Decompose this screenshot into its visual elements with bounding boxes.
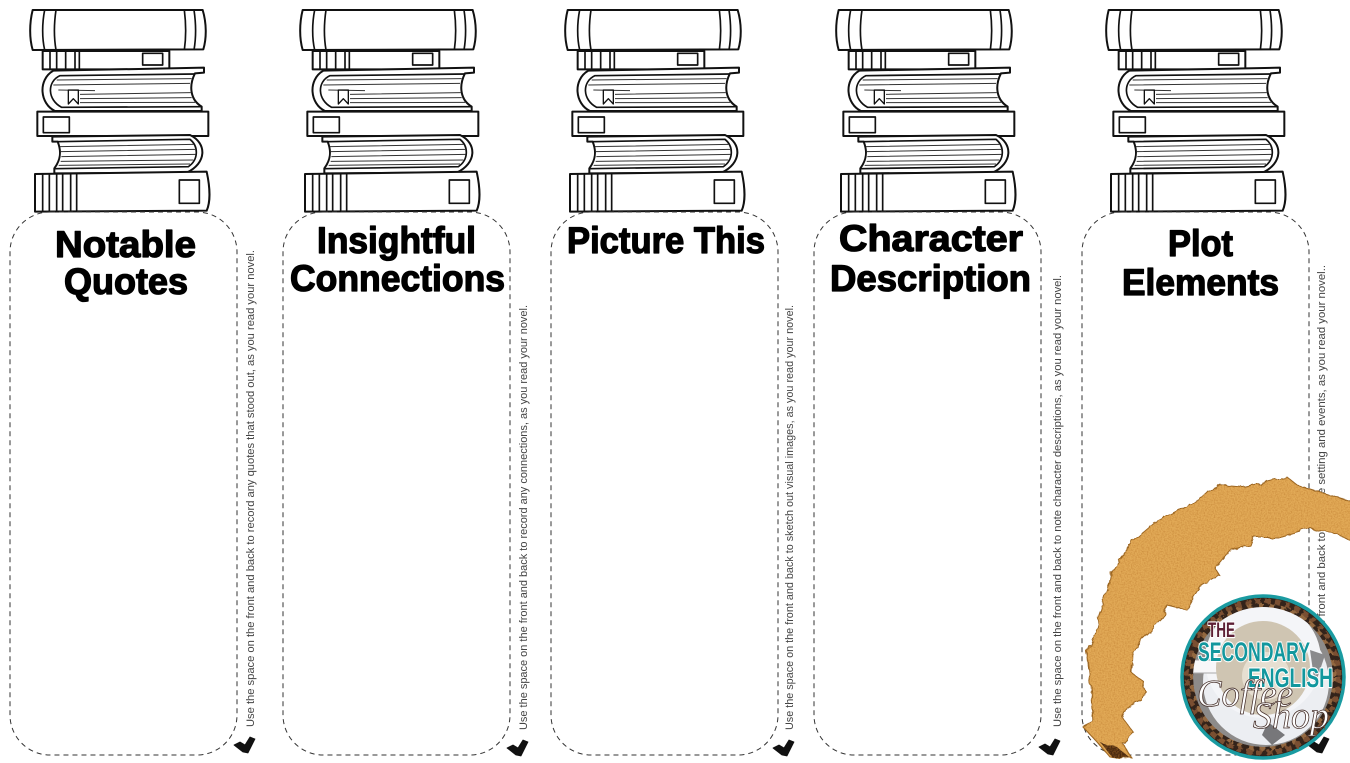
heading: Notable Quotes xyxy=(55,224,196,302)
icon: book stack 4 xyxy=(836,10,1015,212)
badge bean border xyxy=(1182,596,1344,758)
heading: Notable Quotes: Quotes xyxy=(64,261,188,302)
panel: Insightful Connections xyxy=(283,10,530,756)
panel: Plot Elements xyxy=(1082,10,1329,755)
icon: check mark 4 xyxy=(1039,739,1060,755)
icon: book stack 1 xyxy=(30,10,209,212)
icon: check mark 5 xyxy=(1308,737,1329,753)
icon: book stack 3 xyxy=(565,10,744,212)
dashed bookmark outline 5 xyxy=(1082,212,1309,755)
icon: check mark 3 xyxy=(773,740,794,756)
heading: Character Description: Description xyxy=(830,258,1031,299)
heading: Plot Elements xyxy=(1122,223,1279,303)
coffee cup and saucer xyxy=(1192,602,1333,747)
instruction text 2: Use the space on the front and back to record any connections, as you read your novel. xyxy=(518,305,530,730)
heading: Plot Elements: Plot xyxy=(1168,223,1233,264)
icon: check mark 2 xyxy=(507,740,528,756)
dashed bookmark outline 4 xyxy=(814,212,1041,755)
dashed bookmark outline 3 xyxy=(551,212,778,755)
icon: book stack 2 xyxy=(300,10,479,212)
instruction text 5: Use the space on the front and back to note the setting and events, as you read your novel.. xyxy=(1316,265,1328,727)
heading: Insightful Connections xyxy=(290,220,505,299)
heading: Plot Elements: Elements xyxy=(1122,262,1279,303)
instruction text 1: Use the space on the front and back to record any quotes that stood out, as you read your novel. xyxy=(245,250,257,727)
dashed bookmark outline 2 xyxy=(283,212,510,755)
logo badge: The Secondary English Coffee Shop xyxy=(1182,596,1344,758)
instruction text 3: Use the space on the front and back to sketch out visual images, as you read your novel. xyxy=(784,305,796,730)
icon: book stack 5 xyxy=(1106,10,1285,212)
icon: check mark 1 xyxy=(234,737,255,753)
heading: Insightful Connections: Insightful xyxy=(317,220,476,261)
coffee stain ring xyxy=(1083,477,1350,758)
dashed bookmark outline 1 xyxy=(10,212,237,755)
logo wordmark: Shop xyxy=(1253,695,1329,737)
panel: Picture This xyxy=(551,10,796,756)
instruction text 4: Use the space on the front and back to note character descriptions, as you read your novel. xyxy=(1052,275,1064,727)
heading: Insightful Connections: Connections xyxy=(290,258,505,299)
heading: Notable Quotes: Notable xyxy=(55,224,196,265)
heading: Character Description: Character xyxy=(839,218,1023,259)
panel: Character Description xyxy=(814,10,1064,755)
logo wordmark: THE xyxy=(1208,619,1235,642)
heading: Picture This: Picture This xyxy=(567,220,765,261)
logo wordmark: Coffee xyxy=(1197,673,1293,715)
logo wordmark xyxy=(1197,619,1333,737)
heading: Character Description xyxy=(830,218,1031,299)
panel: Notable Quotes xyxy=(10,10,257,755)
